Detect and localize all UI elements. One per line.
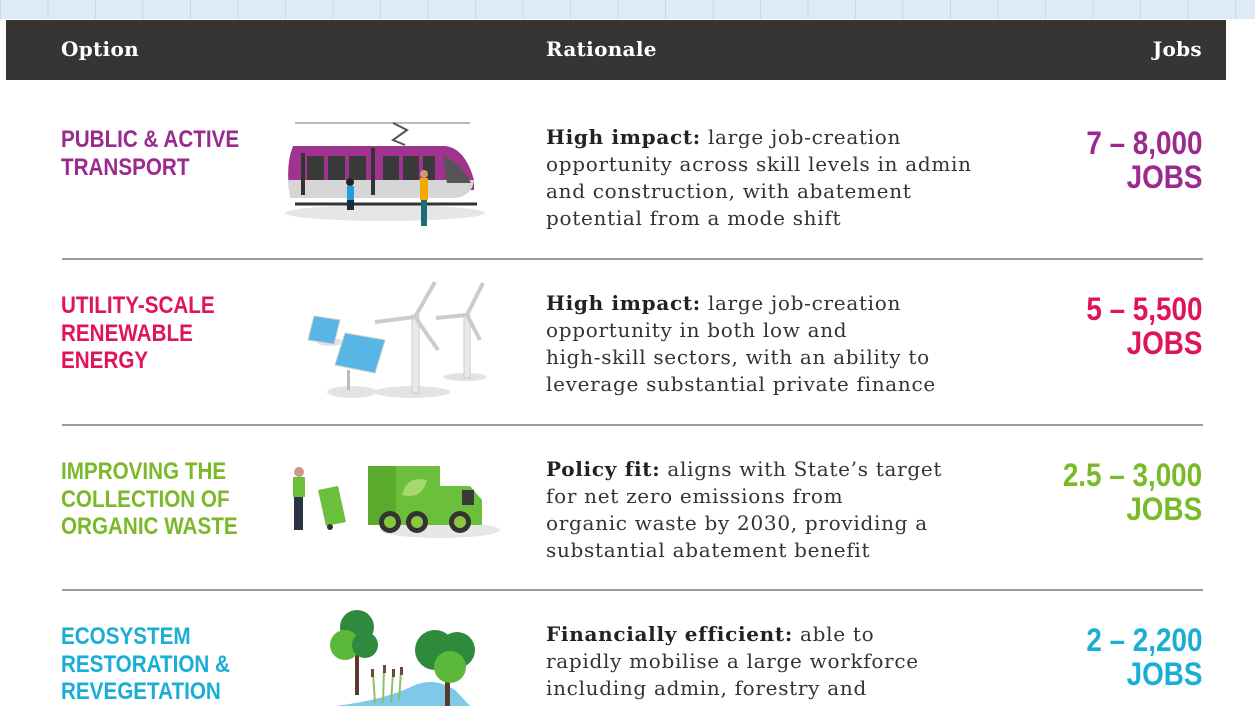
row 2 title: UTILITY-SCALE [61,292,215,319]
row 4 jobs [1086,622,1202,692]
row 1 rationale [546,125,972,230]
header bar: Rationale [546,37,657,61]
row 3 rationale: substantial abatement benefit [546,538,870,562]
header bar [6,20,1226,80]
row 3 title: IMPROVING THE [61,458,226,485]
header bar: Jobs [1153,37,1202,61]
row 4 jobs: JOBS [1126,656,1202,692]
row 3 title: COLLECTION OF [61,486,230,512]
row 1 jobs: 7 – 8,000 [1086,125,1202,161]
row 4 rationale [546,622,919,700]
row 4 rationale: including admin, forestry and [546,676,867,700]
row 1 jobs [1086,125,1202,195]
row 1 rationale: potential from a mode shift [546,206,841,230]
row 4 title [61,623,230,705]
row 2 rationale: opportunity in both low and [546,318,847,342]
row 4 title: REVEGETATION [61,678,221,705]
row 2 rationale [546,291,936,396]
icon: waste truck [293,466,500,538]
row 3 rationale: organic waste by 2030, providing a [546,511,928,535]
row 3 rationale [546,457,942,562]
row 1 rationale: opportunity across skill levels in admin [546,152,972,176]
row 2 jobs: 5 – 5,500 [1086,291,1202,327]
row 2 rationale: leverage substantial private finance [546,372,936,396]
row 1 rationale: High impact: large job-creation [546,125,901,149]
row 2 jobs [1086,291,1202,361]
row 4 rationale: rapidly mobilise a large workforce [546,649,919,673]
row 4 title: ECOSYSTEM [61,623,191,650]
row 2 rationale: High impact: large job-creation [546,291,901,315]
row 1 rationale: and construction, with abatement [546,179,912,203]
row 3 jobs: 2.5 – 3,000 [1063,457,1202,493]
row 3 title: ORGANIC WASTE [61,513,238,540]
row 4 jobs: 2 – 2,200 [1086,622,1202,658]
row 3 rationale: Policy fit: aligns with State’s target [546,457,942,481]
row 3 jobs [1063,457,1202,527]
row 2 title: RENEWABLE [61,320,193,346]
row 1 title [61,126,239,180]
row 1 jobs: JOBS [1126,159,1202,195]
icon: tram [285,122,485,226]
row 3 title [61,458,238,540]
row 1 title: TRANSPORT [61,154,189,180]
header bar: Option [61,37,139,61]
icon: trees and river [330,610,475,706]
row 1 title: PUBLIC & ACTIVE [61,126,239,153]
row 4 rationale: Financially efficient: able to [546,622,874,646]
row 2 title [61,292,215,374]
row 2 jobs: JOBS [1126,325,1202,361]
row 3 rationale: for net zero emissions from [546,484,843,508]
row 2 title: ENERGY [61,347,148,374]
row 4 title: RESTORATION & [61,650,230,678]
row 3 jobs: JOBS [1126,491,1202,527]
row 2 rationale: high-skill sectors, with an ability to [546,345,930,369]
icon: solar and wind [308,281,487,398]
